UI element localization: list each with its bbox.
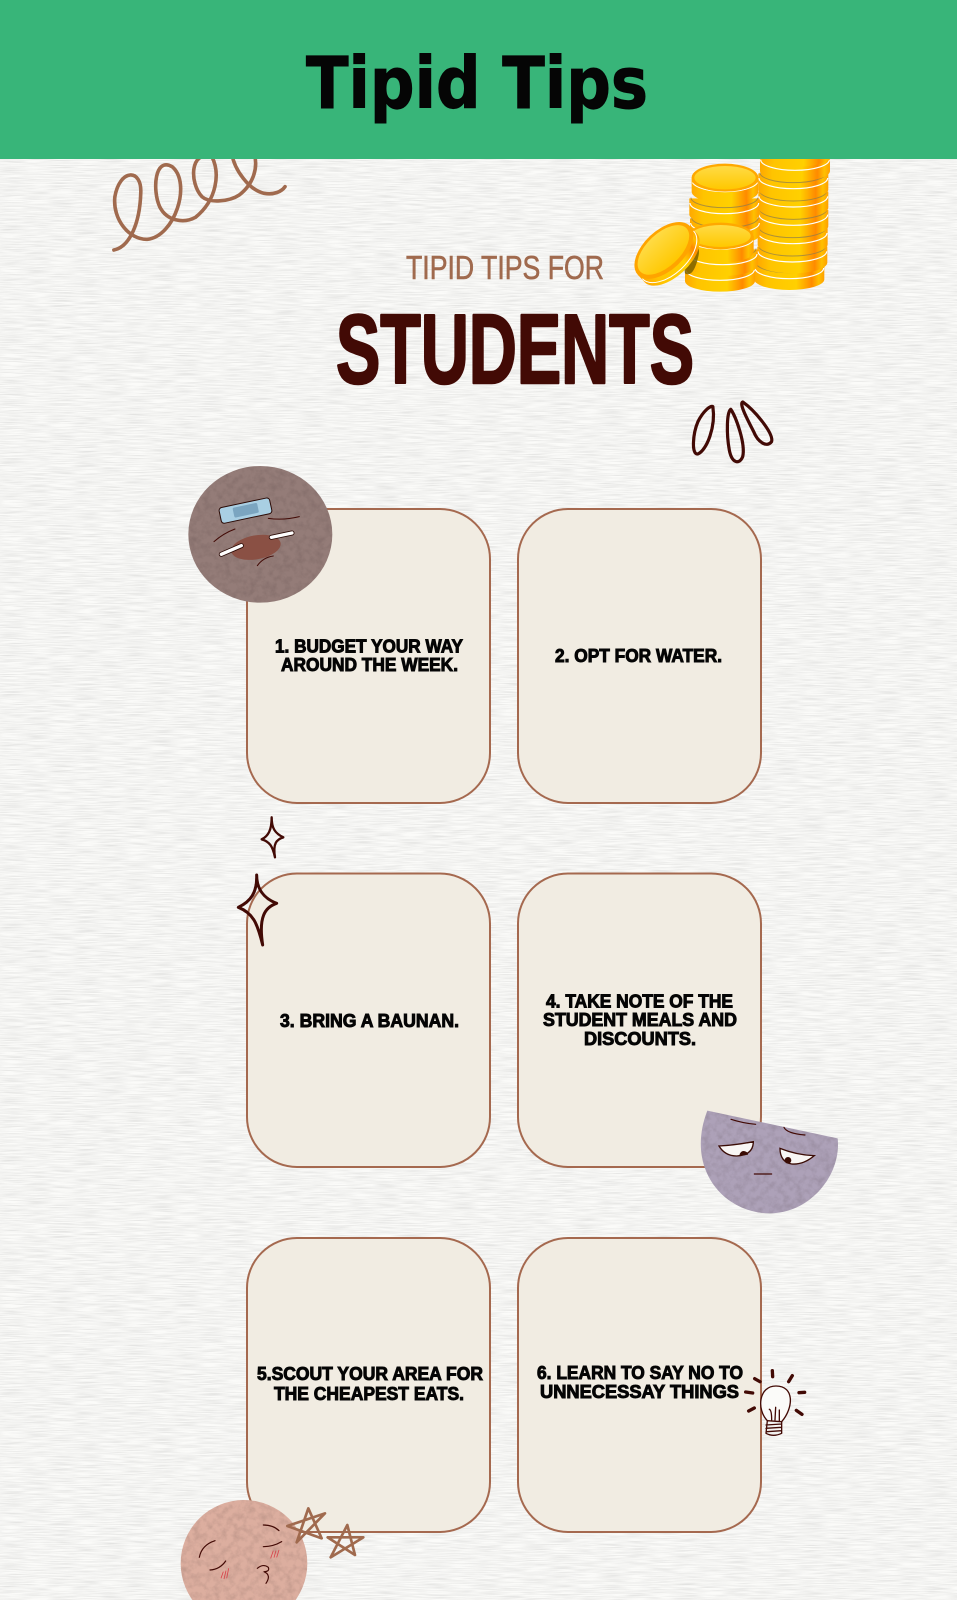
tip 4 text: STUDENT MEALS AND bbox=[543, 1010, 737, 1030]
subheading: TIPID TIPS FOR bbox=[406, 249, 604, 286]
icon: small sparkle bbox=[262, 817, 283, 857]
panel: tip 6 bbox=[518, 1238, 761, 1532]
card 6 bbox=[518, 1238, 761, 1532]
heading: students: STUDENTS bbox=[336, 294, 694, 404]
tip 5 text: THE CHEAPEST EATS. bbox=[274, 1384, 464, 1404]
panel: tip 3 bbox=[247, 874, 490, 1167]
card 2 bbox=[518, 509, 761, 803]
card 3 bbox=[247, 874, 490, 1167]
tip 4 text: DISCOUNTS. bbox=[584, 1029, 696, 1049]
tip 6 text bbox=[537, 1363, 743, 1402]
tip 4 text bbox=[543, 992, 737, 1049]
squiggle doodle bbox=[114, 153, 285, 250]
tip 6 text: UNNECESSAY THINGS bbox=[540, 1382, 739, 1402]
icon: hand-drawn stars bbox=[287, 1508, 363, 1557]
icon: bandaged face bbox=[188, 466, 332, 603]
tip 2 text: 2. OPT FOR WATER. bbox=[555, 646, 722, 666]
card 5 bbox=[247, 1238, 490, 1532]
tip 4 text: 4. TAKE NOTE OF THE bbox=[546, 992, 733, 1012]
tip 6 text: 6. LEARN TO SAY NO TO bbox=[537, 1363, 743, 1383]
tip 5 text: 5.SCOUT YOUR AREA FOR bbox=[257, 1364, 483, 1384]
tip 1 text: AROUND THE WEEK. bbox=[281, 655, 458, 675]
icon: kissing face bbox=[181, 1500, 307, 1600]
icon: large sparkle bbox=[238, 875, 277, 945]
icon: sad half-circle face bbox=[701, 1111, 838, 1213]
title: Tipid Tips bbox=[306, 42, 648, 125]
tip 3 text: 3. BRING A BAUNAN. bbox=[280, 1011, 459, 1031]
icon: gold coin stacks bbox=[624, 139, 832, 296]
panel: tip 1 bbox=[247, 509, 490, 803]
tip 1 text: 1. BUDGET YOUR WAY bbox=[275, 636, 463, 656]
icon: light bulb bbox=[746, 1371, 805, 1435]
icon: petal doodle bbox=[693, 402, 772, 462]
card 4 bbox=[518, 874, 761, 1167]
panel: tip 4 bbox=[518, 874, 761, 1167]
tip 1 text bbox=[275, 636, 463, 675]
tip 5 text bbox=[257, 1364, 483, 1404]
card 1 bbox=[247, 509, 490, 803]
panel: tip 5 bbox=[247, 1238, 490, 1532]
panel: tip 2 bbox=[518, 509, 761, 803]
header band bbox=[0, 0, 957, 159]
